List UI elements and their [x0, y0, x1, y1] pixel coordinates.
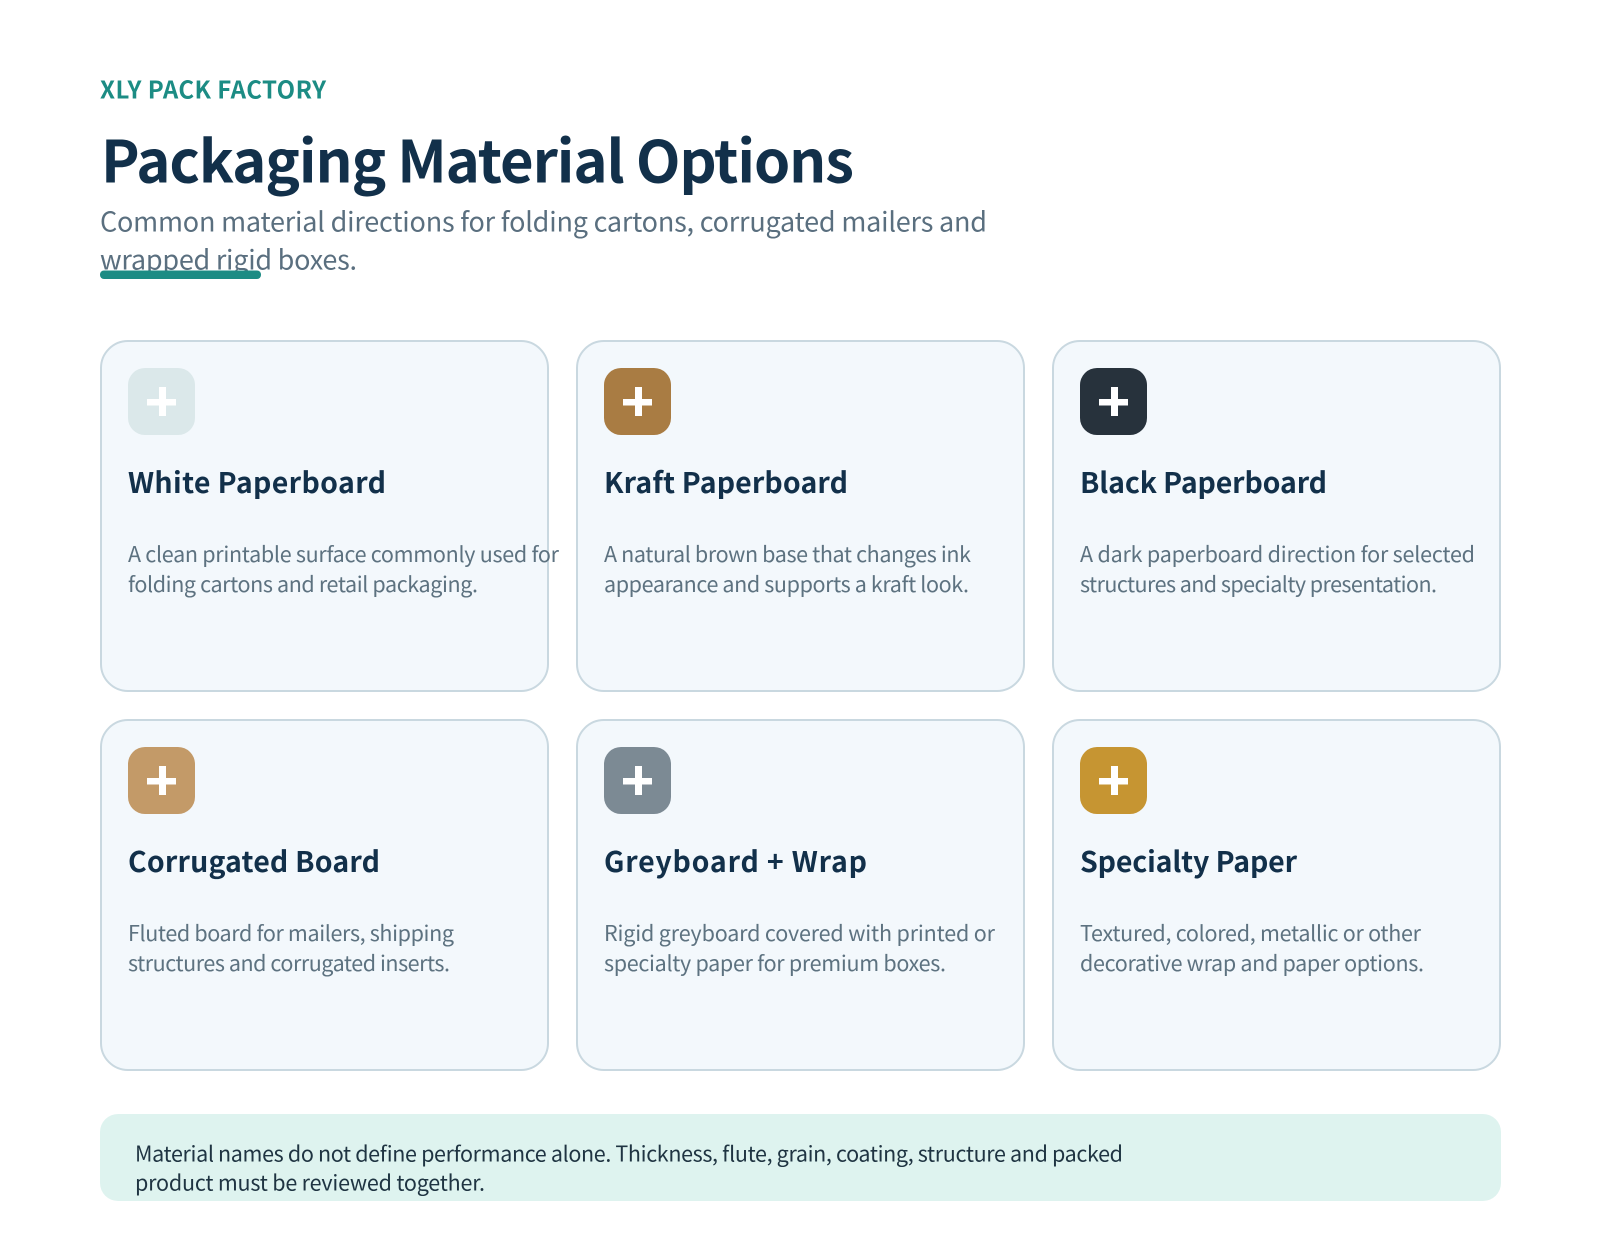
- accent underline: [100, 270, 261, 279]
- subtitle: [100, 200, 987, 278]
- description: specialty paper: [1080, 917, 1424, 978]
- description: specialty paper: decorative wrap and paper options.: [1080, 947, 1424, 978]
- panel: specialty paper: [1053, 720, 1500, 1070]
- icon: corrugated plus tile: [128, 747, 195, 814]
- description: corrugated board: structures and corrugated inserts.: [128, 947, 450, 978]
- note text: product must be reviewed together.: [135, 1166, 485, 1198]
- description: white paperboard: A clean printable surface commonly used for: [128, 538, 560, 569]
- heading: black paperboard: Black Paperboard: [1080, 461, 1327, 502]
- note text: Material names do not define performance alone. Thickness, flute, grain, coating, structure and packed: [135, 1138, 1123, 1168]
- note text: [135, 1138, 1123, 1198]
- title: Packaging Material Options: [101, 116, 854, 200]
- description: kraft paperboard: appearance and supports a kraft look.: [604, 568, 969, 599]
- description: greyboard + wrap: [604, 917, 996, 978]
- subtitle: Common material directions for folding cartons, corrugated mailers and: [100, 200, 987, 240]
- icon: greyboard plus tile: [604, 747, 671, 814]
- description: specialty paper: Textured, colored, metallic or other: [1080, 917, 1422, 948]
- heading: kraft paperboard: Kraft Paperboard: [604, 461, 848, 502]
- icon: kraft plus tile: [604, 368, 671, 435]
- callout: review note: [100, 1114, 1501, 1201]
- icon: white plus tile: [128, 368, 195, 435]
- heading: greyboard + wrap: Greyboard + Wrap: [604, 840, 867, 881]
- description: corrugated board: Fluted board for mailers, shipping: [128, 917, 454, 948]
- panel: corrugated board: [101, 720, 548, 1070]
- panel: black paperboard: [1053, 341, 1500, 691]
- description: kraft paperboard: [604, 538, 971, 599]
- subtitle: wrapped rigid boxes.: [100, 238, 357, 278]
- panel: greyboard + wrap: [577, 720, 1024, 1070]
- description: white paperboard: [128, 538, 560, 599]
- panel: kraft paperboard: [577, 341, 1024, 691]
- icon: black plus tile: [1080, 368, 1147, 435]
- heading: white paperboard: White Paperboard: [128, 461, 386, 502]
- description: greyboard + wrap: Rigid greyboard covered with printed or: [604, 917, 996, 948]
- heading: specialty paper: Specialty Paper: [1080, 840, 1298, 881]
- eyebrow: XLY PACK FACTORY: [100, 70, 327, 106]
- panel: white paperboard: [101, 341, 560, 691]
- description: black paperboard: [1080, 538, 1475, 599]
- heading: corrugated board: Corrugated Board: [128, 840, 380, 881]
- description: black paperboard: structures and specialty presentation.: [1080, 568, 1437, 599]
- description: corrugated board: [128, 917, 454, 978]
- description: black paperboard: A dark paperboard direction for selected: [1080, 538, 1475, 569]
- description: kraft paperboard: A natural brown base that changes ink: [604, 538, 971, 569]
- icon: specialty plus tile: [1080, 747, 1147, 814]
- description: white paperboard: folding cartons and retail packaging.: [128, 568, 478, 599]
- description: greyboard + wrap: specialty paper for premium boxes.: [604, 947, 946, 978]
